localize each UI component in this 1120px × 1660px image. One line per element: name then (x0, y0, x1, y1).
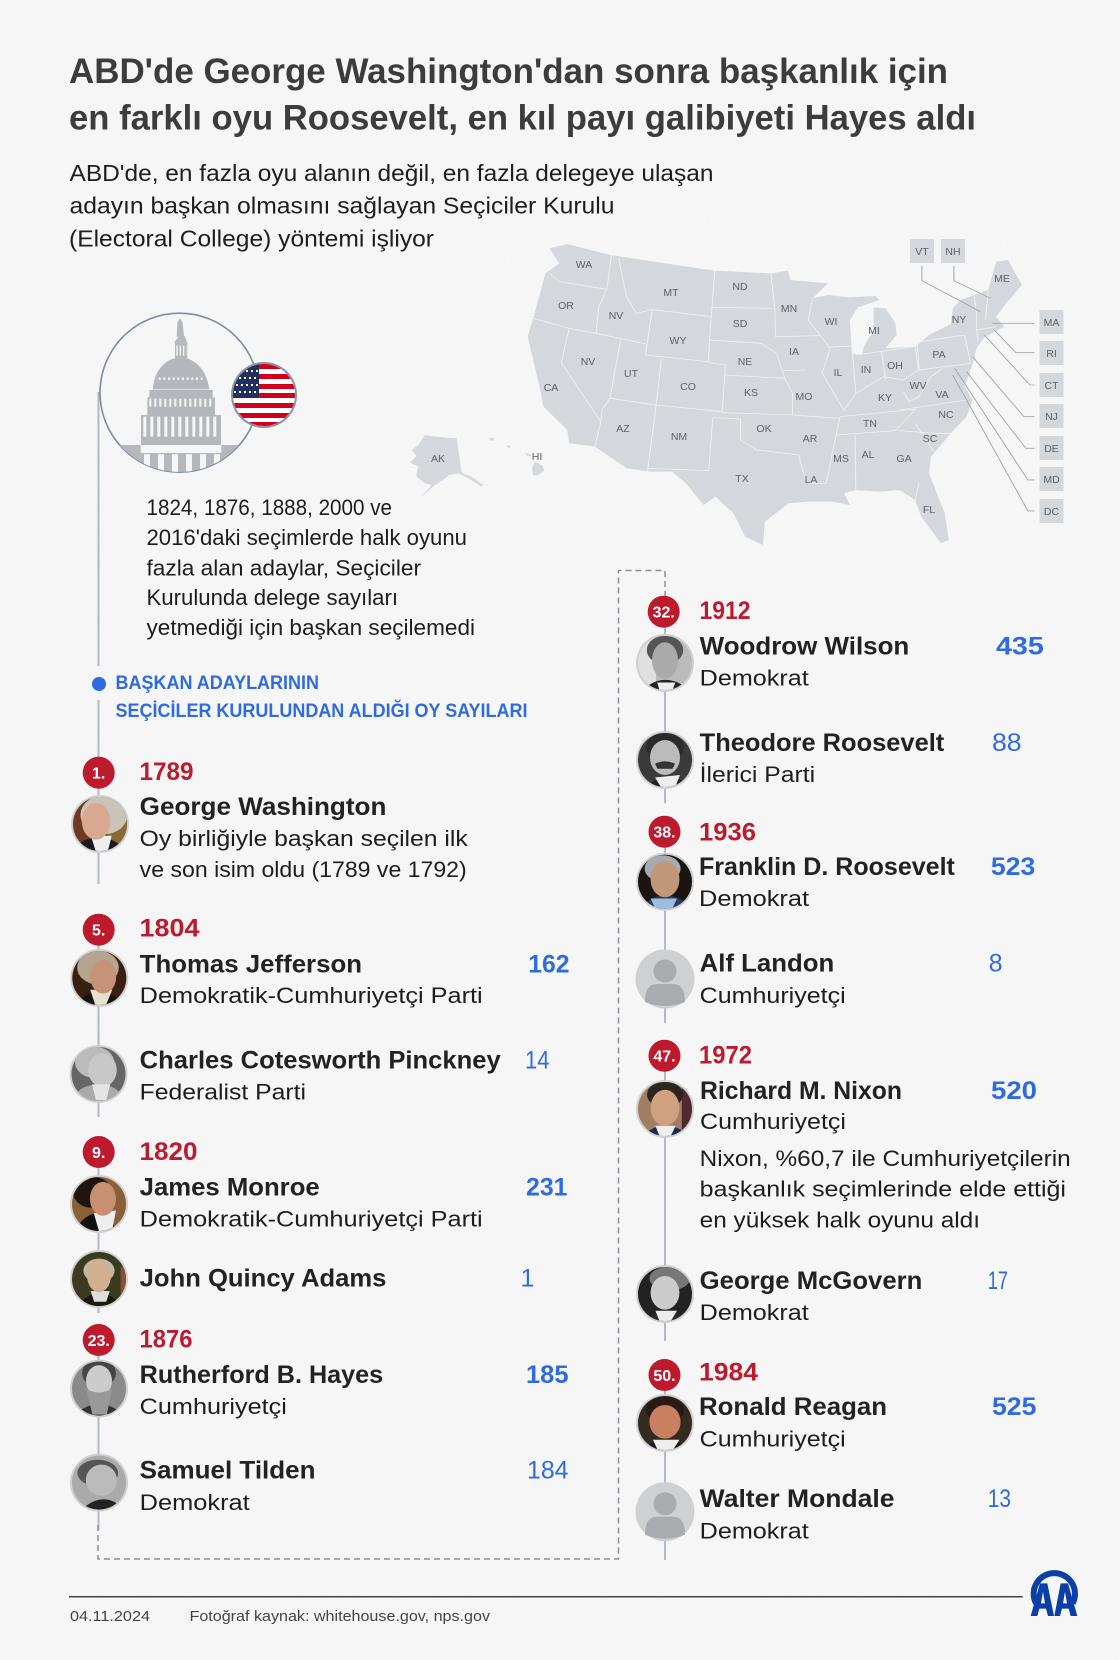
portrait: Richard M. Nixon (636, 1080, 694, 1138)
footer: 04.11.2024 (70, 1608, 150, 1625)
text block: popular vote note: fazla alan adaylar, Seçiciler (146, 556, 421, 580)
entry: Samuel Tilden (70, 1454, 568, 1512)
portrait: Rutherford B. Hayes (70, 1360, 128, 1418)
map: state labels: IL (834, 367, 843, 379)
entry: Theodore Roosevelt: Theodore Roosevelt (700, 729, 945, 757)
entry: 1972 Richard M. Nixon: Richard M. Nixon (700, 1077, 902, 1105)
map: contiguous states (528, 244, 1035, 545)
map: state labels: WY (670, 335, 686, 347)
entry: Theodore Roosevelt: 88 (992, 729, 1022, 757)
map: state labels: ND (732, 281, 748, 293)
subtitle: adayın başkan olmasını sağlayan Seçiciler Kurulu (70, 192, 614, 218)
entry: 1972 Richard M. Nixon: Nixon, %60,7 ile Cumhuriyetçilerin (700, 1146, 1071, 1171)
map: state labels: MT (663, 287, 679, 299)
map: state labels: HI (532, 451, 542, 463)
portrait: George Washington (71, 795, 129, 853)
map: state labels: KS (744, 387, 758, 399)
map: state labels: TX (735, 473, 749, 485)
entry: 1789 George Washington: George Washington (140, 793, 386, 821)
entry: 1936 Franklin D. Roosevelt: Demokrat (699, 886, 810, 911)
entry: 1789 George Washington: Oy birliğiyle başkan seçilen ilk (140, 826, 469, 851)
portrait: Franklin D. Roosevelt (636, 852, 694, 911)
entry: 1912 Woodrow Wilson: 32. (653, 604, 675, 622)
entry: 1820 James Monroe: 9. (92, 1145, 105, 1162)
map: Alaska (410, 435, 483, 497)
map: state labels: SC (923, 433, 938, 445)
map: state labels: WI (825, 316, 837, 328)
map: state labels: GA (896, 453, 912, 465)
footer: Fotoğraf kaynak: whitehouse.gov, nps.gov (190, 1608, 491, 1625)
entry: John Quincy Adams (70, 1250, 534, 1308)
map: state labels: RI (1046, 348, 1057, 360)
map: state labels: NC (938, 409, 954, 421)
portrait: Charles C. Pinckney (70, 1045, 128, 1103)
entry: 1984 Ronald Reagan: Cumhuriyetçi (700, 1427, 846, 1452)
text block: popular vote note: yetmediği için başkan seçilemedi (146, 615, 475, 640)
entry: 1912 Woodrow Wilson: 1912 (700, 597, 750, 625)
entry: 1912 Woodrow Wilson: Woodrow Wilson (700, 633, 909, 661)
entry: 1984 Ronald Reagan: 525 (992, 1393, 1036, 1421)
map: state labels: NM (671, 431, 687, 443)
map: state labels: OR (558, 300, 574, 312)
title: en farklı oyu Roosevelt, en kıl payı galibiyeti Hayes aldı (69, 98, 976, 138)
entry: 1972 Richard M. Nixon: en yüksek halk oyunu aldı (700, 1208, 980, 1233)
entry: 1820 James Monroe: 231 (526, 1174, 568, 1202)
icon: AA logo (1031, 1573, 1077, 1616)
map: state labels: NV (581, 356, 595, 368)
entry: Theodore Roosevelt (636, 731, 1020, 789)
portrait: Ronald Reagan (636, 1394, 694, 1452)
map: state labels: MN (781, 303, 797, 315)
entry: 1804 Thomas Jefferson: 5. (92, 922, 105, 940)
entry: 1984 Ronald Reagan: 1984 (699, 1358, 758, 1386)
entry: 1972 Richard M. Nixon: 47. (653, 1048, 676, 1066)
entry: John Quincy Adams: John Quincy Adams (140, 1265, 386, 1293)
map: United States (410, 239, 1063, 545)
capitol icon in circle (100, 313, 259, 476)
map: state labels: IA (789, 346, 799, 358)
text block: popular vote note (146, 495, 475, 640)
entry: 1972 Richard M. Nixon: 1972 (699, 1042, 752, 1070)
entry: George McGovern: 17 (988, 1267, 1008, 1295)
entry: Walter Mondale (636, 1482, 1011, 1544)
map: state labels: NV (609, 310, 623, 322)
entry: 1972 Richard M. Nixon (633, 1040, 1071, 1233)
entry: 1912 Woodrow Wilson: 435 (996, 633, 1044, 661)
entry: 1912 Woodrow Wilson (630, 596, 1044, 699)
portrait: George McGovern (636, 1265, 694, 1323)
icon: US flag (231, 362, 298, 428)
entry: 1936 Franklin D. Roosevelt: 38. (653, 824, 676, 842)
text block: popular vote note: 2016'daki seçimlerde halk oyunu (146, 525, 467, 550)
map: state labels: CA (544, 382, 558, 394)
entry: Charles Cotesworth Pinckney: Federalist Parti (140, 1079, 306, 1104)
entry: 1876 Rutherford B. Hayes (64, 1324, 569, 1424)
map: state labels: CT (1044, 380, 1059, 392)
map: state labels: SD (733, 318, 748, 330)
map: state labels: AR (803, 433, 818, 445)
map: state labels: MS (833, 453, 849, 465)
map: state labels: MO (796, 391, 812, 403)
entry: Charles Cotesworth Pinckney: Charles Cotesworth Pinckney (140, 1047, 501, 1075)
entry: 1820 James Monroe: 1820 (140, 1138, 198, 1166)
entry: 1936 Franklin D. Roosevelt (633, 816, 1035, 914)
entry: 1789 George Washington: ve son isim oldu (1789 ve 1792) (140, 857, 467, 882)
entry: Charles Cotesworth Pinckney: 14 (525, 1047, 549, 1075)
portrait: Thomas Jefferson (70, 949, 128, 1007)
legend: electoral votes heading: SEÇİCİLER KURULUNDAN ALDIĞI OY SAYILARI (116, 700, 528, 722)
map: state labels: UT (624, 368, 639, 380)
map: state labels: MI (868, 325, 880, 337)
entry: 1804 Thomas Jefferson (64, 914, 569, 1014)
entry: Walter Mondale: Demokrat (700, 1519, 810, 1544)
map: state labels: MA (1044, 317, 1059, 329)
entry: John Quincy Adams: 1 (520, 1265, 534, 1293)
map: state labels: FL (923, 504, 935, 516)
entry: 1820 James Monroe (64, 1136, 568, 1240)
map: Hawaii (489, 437, 544, 475)
map: state labels: DE (1044, 443, 1059, 455)
text block: popular vote note: 1824, 1876, 1888, 2000 ve (146, 495, 392, 520)
portrait: placeholder Walter Mondale (636, 1482, 694, 1541)
portrait: Theodore Roosevelt (636, 731, 694, 789)
entry: 1876 Rutherford B. Hayes: 185 (526, 1361, 569, 1389)
portrait: Samuel Tilden (70, 1454, 128, 1512)
title: ABD'de George Washington'dan sonra başkanlık için (69, 52, 948, 91)
map: state labels: WV (910, 380, 926, 392)
entry: Charles Cotesworth Pinckney (70, 1045, 549, 1103)
entry: 1789 George Washington (66, 757, 469, 882)
entry: George McGovern (636, 1265, 1008, 1323)
entry: Walter Mondale: 13 (988, 1485, 1011, 1513)
entry: Samuel Tilden: Demokrat (140, 1490, 251, 1515)
map: state labels: AK (431, 453, 445, 465)
subtitle: ABD'de, en fazla oyu alanın değil, en fazla delegeye ulaşan (70, 160, 714, 186)
map: state labels: PA (932, 349, 946, 361)
entry: 1789 George Washington: 1789 (140, 758, 194, 786)
portrait: John Quincy Adams (70, 1250, 128, 1308)
entry: 1876 Rutherford B. Hayes: Rutherford B. Hayes (140, 1361, 383, 1389)
entry: 1804 Thomas Jefferson: 162 (528, 950, 570, 978)
entry: Alf Landon (636, 949, 1002, 1008)
entry: George McGovern: Demokrat (700, 1300, 810, 1325)
entry: 1804 Thomas Jefferson: Thomas Jefferson (140, 950, 362, 978)
portrait: James Monroe (70, 1175, 128, 1233)
entry: Samuel Tilden: 184 (527, 1456, 569, 1484)
entry: 1984 Ronald Reagan: Ronald Reagan (699, 1393, 887, 1421)
entry: 1876 Rutherford B. Hayes: 1876 (140, 1325, 192, 1353)
entry: 1820 James Monroe: Demokratik-Cumhuriyetçi Parti (140, 1206, 483, 1231)
legend: electoral votes heading: BAŞKAN ADAYLARININ (116, 673, 319, 694)
map: state labels: OK (756, 423, 772, 435)
map: state labels: ME (994, 273, 1010, 285)
map: state labels: NJ (1045, 411, 1058, 423)
entry: 1912 Woodrow Wilson: Demokrat (700, 666, 810, 690)
map: state labels: NH (945, 246, 961, 258)
subtitle: (Electoral College) yöntemi işliyor (69, 226, 434, 252)
entry: 1820 James Monroe: James Monroe (140, 1174, 320, 1202)
entry: 1804 Thomas Jefferson: 1804 (140, 915, 200, 943)
map: state labels (431, 246, 1060, 518)
legend: electoral votes heading (92, 673, 528, 722)
entry: Alf Landon: Cumhuriyetçi (700, 983, 846, 1008)
entry: Walter Mondale: Walter Mondale (700, 1485, 895, 1513)
footer (69, 1597, 1023, 1625)
map: state labels: DC (1044, 506, 1059, 518)
entry: 1984 Ronald Reagan: 50. (653, 1368, 676, 1385)
map: small state boxes (910, 239, 1064, 523)
portrait: Woodrow Wilson (636, 634, 694, 692)
entry: Theodore Roosevelt: İlerici Parti (700, 762, 815, 787)
entry: 1972 Richard M. Nixon: başkanlık seçimlerinde elde ettiği (700, 1177, 1066, 1202)
map: state labels: MD (1043, 474, 1060, 486)
entry: 1876 Rutherford B. Hayes: Cumhuriyetçi (140, 1394, 287, 1419)
map: state labels: AZ (616, 423, 630, 435)
entry: 1972 Richard M. Nixon: Cumhuriyetçi (700, 1109, 846, 1134)
portrait: placeholder Alf Landon (636, 950, 694, 1008)
map: callout lines (922, 266, 1035, 511)
map: state labels: NE (738, 356, 752, 368)
entry: 1804 Thomas Jefferson: Demokratik-Cumhuriyetçi Parti (140, 983, 483, 1008)
entry: Alf Landon: 8 (989, 949, 1002, 977)
map: state labels: NY (952, 314, 966, 326)
map: state labels: VA (935, 389, 949, 401)
map: state labels: TN (863, 418, 877, 430)
entry: 1936 Franklin D. Roosevelt: 523 (991, 853, 1035, 881)
entry: 1876 Rutherford B. Hayes: 23. (88, 1333, 110, 1350)
subtitle (69, 160, 714, 252)
map: state labels: CO (680, 381, 696, 393)
entry: Samuel Tilden: Samuel Tilden (140, 1456, 316, 1484)
map: state labels: WA (576, 259, 592, 271)
entry: 1936 Franklin D. Roosevelt: Franklin D. Roosevelt (699, 853, 956, 881)
entry: 1789 George Washington: 1. (92, 766, 105, 782)
entry: 1936 Franklin D. Roosevelt: 1936 (699, 818, 756, 846)
entry: George McGovern: George McGovern (700, 1267, 922, 1295)
map: state labels: OH (887, 360, 903, 372)
map: state labels: AL (862, 449, 875, 461)
timeline lines and dashed connector (98, 392, 665, 1560)
map: state labels: LA (805, 474, 817, 486)
entry: 1972 Richard M. Nixon: 520 (991, 1077, 1037, 1105)
map: state labels: IN (861, 364, 871, 376)
map: state labels: KY (878, 392, 892, 404)
title (69, 52, 976, 138)
text block: popular vote note: Kurulunda delege sayıları (146, 585, 398, 610)
entry: 1984 Ronald Reagan (633, 1358, 1036, 1455)
entry: Alf Landon: Alf Landon (700, 949, 834, 977)
map: state labels: VT (915, 246, 929, 258)
